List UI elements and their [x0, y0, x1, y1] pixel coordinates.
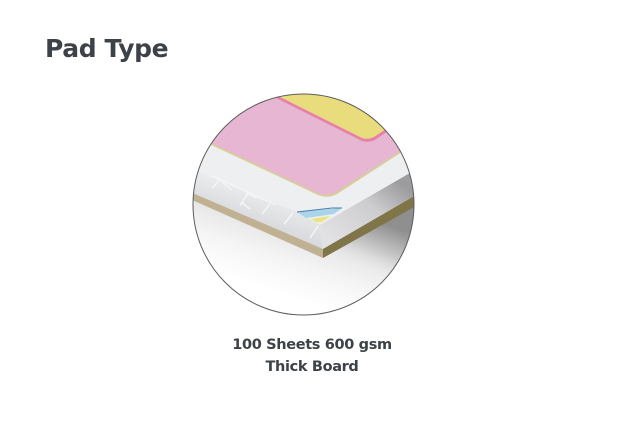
worn front face of sheets: [203, 197, 322, 248]
icon: circular close-up of thick board pad corner: [192, 94, 414, 316]
drop shadow: [343, 208, 414, 268]
title: Pad Type: [45, 34, 168, 63]
circle outline: [193, 94, 414, 315]
board edge right: [323, 195, 416, 258]
right side of sheets: [324, 174, 414, 238]
yellow tab: [280, 94, 384, 139]
caption: 100 Sheets 600 gsm: [232, 337, 392, 353]
pink sheet border: [211, 143, 400, 197]
top surface white sheet: [190, 142, 410, 225]
floor: [194, 200, 393, 294]
board edge front: [190, 192, 323, 258]
pink sheet: [212, 98, 400, 195]
corner colour sheets: [297, 208, 342, 222]
yellow tab border: [276, 97, 386, 142]
caption: Thick Board: [266, 359, 358, 375]
caption: [232, 337, 392, 375]
